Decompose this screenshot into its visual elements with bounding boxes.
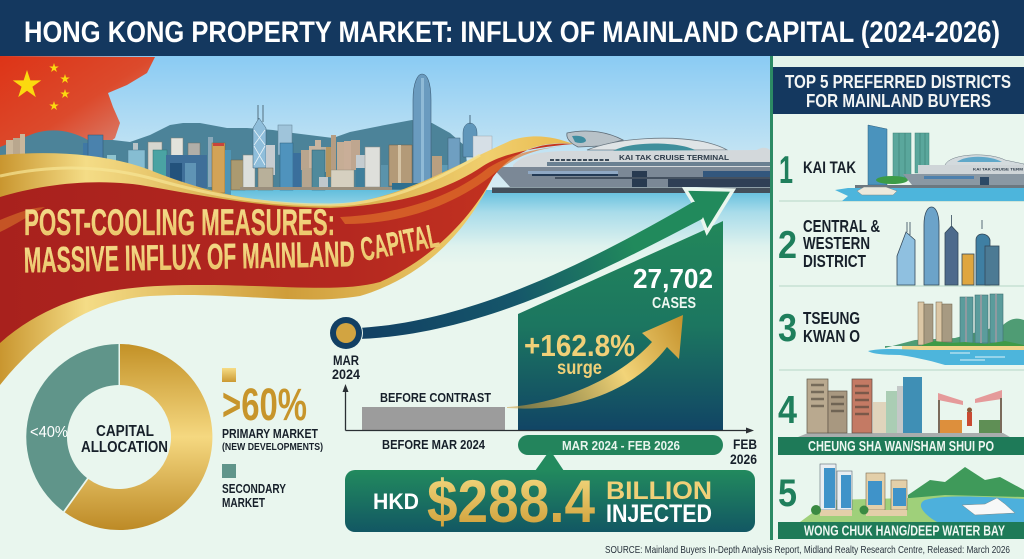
district 3: TSEUNG <box>803 308 860 328</box>
district 5 <box>778 464 1024 540</box>
label: BEFORE CONTRAST <box>380 390 491 405</box>
donut centre label: ALLOCATION <box>81 439 168 456</box>
skyline <box>6 74 492 195</box>
district 3 <box>778 294 1024 365</box>
label: feb 2026: FEB <box>733 437 757 452</box>
surge figure <box>524 328 635 379</box>
secondary segment <box>26 344 118 511</box>
ship name: KAI TAK CRUISE TERMINAL <box>619 153 729 162</box>
district 1: KAI TAK <box>803 158 857 177</box>
label: feb 2026 <box>730 437 757 467</box>
panel: harbour scene <box>0 56 770 265</box>
callout: capital injected <box>345 450 755 535</box>
secondary label: SECONDARY <box>222 481 286 496</box>
growth arrow <box>329 189 733 350</box>
primary label: PRIMARY MARKET <box>222 426 318 441</box>
secondary label <box>222 481 286 510</box>
district 4 <box>778 377 1024 455</box>
panel: top 5 districts <box>770 56 1024 540</box>
period pill: MAR 2024 - FEB 2026 <box>562 438 680 453</box>
callout: capital injected: BILLION <box>606 477 712 505</box>
icon: tseung kwan o skyline <box>868 294 1024 365</box>
header bar <box>0 0 1024 56</box>
district 2: CENTRAL & <box>803 216 880 236</box>
secondary label: MARKET <box>222 495 265 510</box>
surge figure: surge <box>557 358 602 379</box>
primary swatch <box>222 368 236 382</box>
district 1: 1 <box>779 149 793 192</box>
secondary swatch <box>222 464 236 478</box>
ribbon heading <box>23 202 442 280</box>
callout: capital injected: $288.4 <box>427 468 596 535</box>
axes <box>346 388 750 430</box>
ribbon heading: CAPITAL <box>357 216 442 268</box>
secondary value: <40% <box>30 424 68 441</box>
district 1 <box>779 125 1024 201</box>
primary value: >60% <box>222 379 307 430</box>
donut chart: capital allocation <box>26 344 212 530</box>
district 2: 2 <box>778 224 797 267</box>
donut centre label <box>81 423 168 456</box>
mountains <box>0 120 470 190</box>
label: mar 2024: 2024 <box>332 367 360 382</box>
label: feb 2026: 2026 <box>730 452 757 467</box>
icon: central skyline <box>897 207 999 285</box>
district 3: 3 <box>778 307 797 350</box>
ribbon heading: MASSIVE INFLUX OF MAINLAND <box>23 233 355 280</box>
cruise terminal ship <box>492 131 770 193</box>
callout: capital injected: INJECTED <box>606 500 712 528</box>
legend <box>222 368 323 510</box>
district 5: 5 <box>778 472 797 515</box>
district 4: 4 <box>778 389 797 432</box>
district 2: WESTERN <box>803 233 870 253</box>
mainland flag map <box>0 56 155 160</box>
district 2 <box>778 207 999 285</box>
label: BEFORE MAR 2024 <box>382 437 486 452</box>
donut centre label: CAPITAL <box>96 423 154 440</box>
cases figure: CASES <box>652 295 696 312</box>
district 3: KWAN O <box>803 326 860 346</box>
icon: kai tak skyline: KAI TAK CRUISE TERM <box>973 168 1023 172</box>
primary label: (NEW DEVELOPMENTS) <box>222 441 323 453</box>
icon: deep water bay <box>800 464 1024 522</box>
surge arrow <box>507 315 683 409</box>
cases figure: 27,702 <box>633 263 713 294</box>
icon: sham shui po street <box>798 377 1010 437</box>
label: mar 2024: MAR <box>333 353 359 368</box>
start marker <box>329 316 363 350</box>
callout: capital injected: HKD <box>373 489 419 514</box>
panel heading <box>773 67 1024 114</box>
surge figure: +162.8% <box>524 328 635 363</box>
sea <box>0 190 770 265</box>
ribbon heading: POST-COOLING MEASURES: <box>24 202 335 243</box>
icon: kai tak skyline <box>835 125 1024 201</box>
period pill <box>518 435 723 455</box>
district 2: DISTRICT <box>803 251 866 271</box>
primary label <box>222 426 323 453</box>
primary segment <box>65 344 212 530</box>
after block <box>518 221 723 430</box>
cases figure <box>633 263 713 312</box>
bar chart <box>332 221 757 467</box>
before bar <box>362 407 505 430</box>
ribbon banner <box>0 136 573 385</box>
sky <box>0 56 770 191</box>
label: mar 2024 <box>332 353 360 382</box>
